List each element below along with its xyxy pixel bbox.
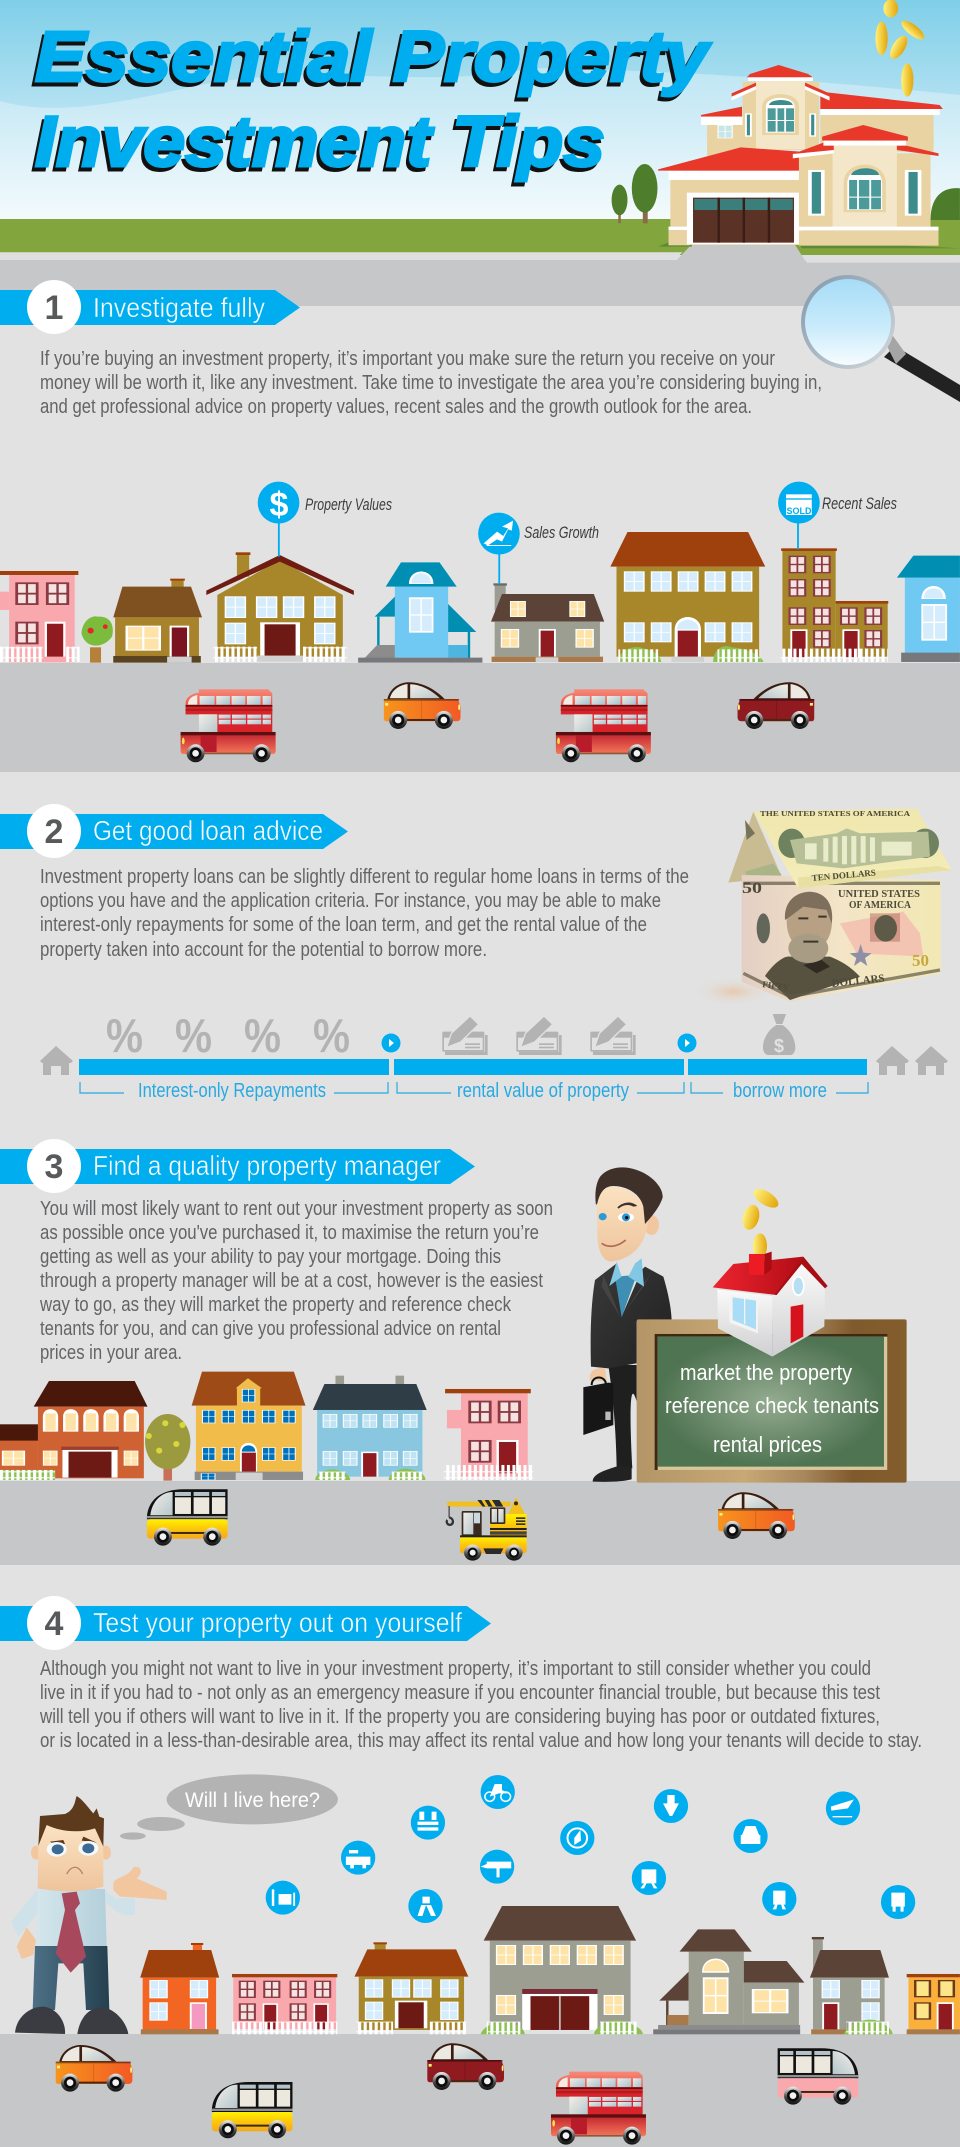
- house: apartment block: [781, 548, 888, 662]
- icon: house left: [40, 1046, 73, 1075]
- vehicle: maroon car: [738, 682, 814, 729]
- vehicle: crane truck: [447, 1497, 527, 1561]
- house: narrow grey: [810, 1937, 893, 2034]
- bill captions: THE UNITED STATES OF AMERICA: [760, 810, 910, 818]
- label: recent sales: Recent Sales: [822, 494, 897, 513]
- section 2 text: options you have and the application criteria. For instance, you may be able to make: [40, 890, 661, 912]
- section 1 banner: Investigate fully: [93, 292, 265, 323]
- section 3 text: tenants for you, and can give you professional advice on rental: [40, 1318, 501, 1340]
- section 2 banner: [0, 804, 348, 858]
- section 2 banner: Get good loan advice: [93, 815, 323, 846]
- brackets: [80, 1082, 868, 1093]
- tree: round: [145, 1414, 190, 1481]
- section 2 text: Investment property loans can be slightly different to regular home loans in terms of the: [40, 866, 689, 888]
- vehicle: yellow bus: [212, 2082, 292, 2138]
- section 3 text: You will most likely want to rent out your investment property as soon: [40, 1198, 553, 1220]
- label: interest-only: Interest-only Repayments: [138, 1080, 326, 1102]
- bill captions: TEN DOLLARS: [811, 867, 876, 883]
- vehicle: red bus: [551, 2072, 646, 2145]
- vehicle: orange car: [718, 1492, 795, 1539]
- section 1 banner: 1: [45, 289, 63, 327]
- vehicle: orange car: [384, 682, 461, 729]
- house: big grey: [481, 1906, 643, 2034]
- chalkboard text: market the property: market the property: [680, 1360, 852, 1385]
- section 3 text: way to go, as they will market the property and reference check: [39, 1294, 512, 1316]
- node: second arrow: [678, 1034, 696, 1052]
- thought bubble: [120, 1774, 338, 1840]
- bill captions: [742, 810, 929, 993]
- bill captions: 50: [742, 880, 762, 897]
- title: Essential Property: [35, 18, 712, 97]
- street scene: section 4: [56, 1774, 960, 2145]
- road: section 3: [0, 1481, 960, 1565]
- icon: house right two: [915, 1046, 948, 1075]
- house: pink: [444, 1389, 533, 1480]
- section 3 text: prices in your area.: [40, 1342, 182, 1364]
- icons: percent signs: %: [313, 1009, 350, 1062]
- vehicle: pink bus: [778, 2048, 858, 2105]
- chalkboard: [637, 1319, 907, 1483]
- pin: recent sales: [778, 482, 820, 524]
- title: Investment Tips: [32, 107, 602, 186]
- bill captions: FIFTY: [762, 979, 790, 993]
- icon: sold sign text: SOLD: [786, 506, 812, 516]
- character: worried man: [11, 1796, 167, 2034]
- title: Essential Property: [32, 22, 709, 101]
- house: orange: [140, 1943, 219, 2034]
- icon: red roof house with coins: [713, 1185, 828, 1357]
- section 3 text: through a property manager will be at a cost, however is the easiest: [40, 1270, 543, 1292]
- label: property values: Property Values: [305, 495, 392, 514]
- vehicle: red bus: [556, 689, 651, 762]
- section 3 text: as possible once you've purchased it, to maximise the return you’re: [40, 1222, 539, 1244]
- house: grey tower: [653, 1929, 804, 2034]
- character: businessman: [583, 1167, 672, 1482]
- house: large olive: [610, 532, 765, 662]
- section 3 banner: 3: [45, 1148, 63, 1186]
- bubble text: Will I live here?: [185, 1789, 320, 1812]
- street scene: section 3: [0, 1372, 795, 1546]
- section 4 banner: 4: [45, 1605, 64, 1643]
- section 4 banner: Test your property out on yourself: [93, 1607, 462, 1638]
- house: olive gable: [206, 552, 354, 662]
- chalkboard text: reference check tenants: reference check tenants: [665, 1393, 879, 1418]
- pin: sales growth: [478, 513, 520, 555]
- tree: small apple: [81, 616, 113, 663]
- chalkboard text: rental prices: rental prices: [713, 1432, 822, 1457]
- house: grey with dormers: [491, 583, 604, 662]
- manager character and chalkboard group: [583, 1167, 907, 1483]
- pin line: recent sales: [797, 523, 799, 549]
- section 4 text: [39, 1658, 922, 1752]
- section 2 text: interest-only repayments for some of the loan term, and get the rental value of the: [40, 914, 647, 936]
- icons: percent signs: [106, 1009, 350, 1062]
- pin: property values: [258, 482, 299, 524]
- vehicle: yellow bus: [147, 1489, 228, 1546]
- header scene: sky, grass and road: [0, 0, 960, 306]
- bill captions: OF AMERICA: [849, 900, 912, 911]
- section 3 banner: Find a quality property manager: [93, 1150, 441, 1181]
- label: borrow more: borrow more: [733, 1080, 827, 1102]
- section 3 text: [39, 1198, 553, 1364]
- icons: percent signs: %: [244, 1009, 281, 1062]
- section 1 text: [40, 348, 822, 418]
- road: section 1: [0, 663, 960, 772]
- bill captions: 50: [912, 951, 929, 970]
- title: [32, 18, 712, 186]
- timeline: loan stages: [40, 1009, 948, 1102]
- section 4 banner: [0, 1596, 491, 1650]
- label: sales growth: Sales Growth: [524, 523, 599, 542]
- vehicle: orange car: [56, 2045, 132, 2092]
- house: brick: [0, 1381, 148, 1480]
- icon: house right one: [876, 1046, 909, 1075]
- icon: magnifying glass: [801, 275, 960, 402]
- icon: money bag: [763, 1014, 795, 1055]
- node: first arrow: [382, 1034, 400, 1052]
- pin line: sales growth: [498, 554, 500, 584]
- icons: amenity circles: [266, 1775, 915, 1923]
- bill captions: DOLLARS: [831, 972, 885, 990]
- section 2 banner: 2: [45, 813, 63, 851]
- section 1 text: money will be worth it, like any investment. Take time to investigate the area you’re considering buying in,: [40, 372, 822, 394]
- section 1 text: If you’re buying an investment property, it’s important you make sure the return you receive on your: [40, 348, 775, 370]
- section 1 text: and get professional advice on property values, recent sales and the growth outlook for the area.: [40, 396, 752, 418]
- title: Investment Tips: [35, 103, 605, 182]
- pin line: property values: [278, 523, 280, 557]
- house: pink terrace: [0, 571, 80, 662]
- house: blue with dark roof: [313, 1376, 427, 1480]
- street scene: section 1 houses: [0, 482, 960, 762]
- section 2 text: property taken into account for the potential to borrow more.: [40, 939, 487, 961]
- illustration: house made of dollar bills: [690, 808, 952, 1007]
- house: blue right edge: [897, 556, 960, 662]
- vehicle: maroon car: [427, 2043, 504, 2090]
- house: yellow edge: [907, 1974, 960, 2034]
- icons: amenity glyphs: [272, 1784, 905, 1916]
- house: pink row: [232, 1974, 337, 2034]
- label: rental value: rental value of property: [457, 1080, 629, 1102]
- icons: percent signs: %: [175, 1009, 212, 1062]
- bill captions: UNITED STATES: [838, 889, 920, 900]
- section 3 text: getting as well as your ability to pay your mortgage. Doing this: [40, 1246, 501, 1268]
- vehicle: red bus: [181, 689, 276, 762]
- progress bars: [79, 1059, 867, 1075]
- house: blue tall: [358, 562, 482, 663]
- dollar on bag: $: [774, 1036, 784, 1056]
- section 3 banner: [0, 1139, 475, 1193]
- icons: cheque and pen: [442, 1016, 636, 1055]
- illustration: mansion with trees and coins: [0, 0, 960, 263]
- house: olive: [354, 1942, 468, 2034]
- icons: percent signs: %: [106, 1009, 143, 1062]
- icon: dollar pin glyph: $: [270, 486, 289, 524]
- house: brown cottage: [113, 579, 202, 663]
- section 1 banner: [0, 280, 300, 334]
- section 2 text: [40, 866, 689, 961]
- house: yellow: [192, 1372, 305, 1480]
- road: section 4: [0, 2034, 960, 2147]
